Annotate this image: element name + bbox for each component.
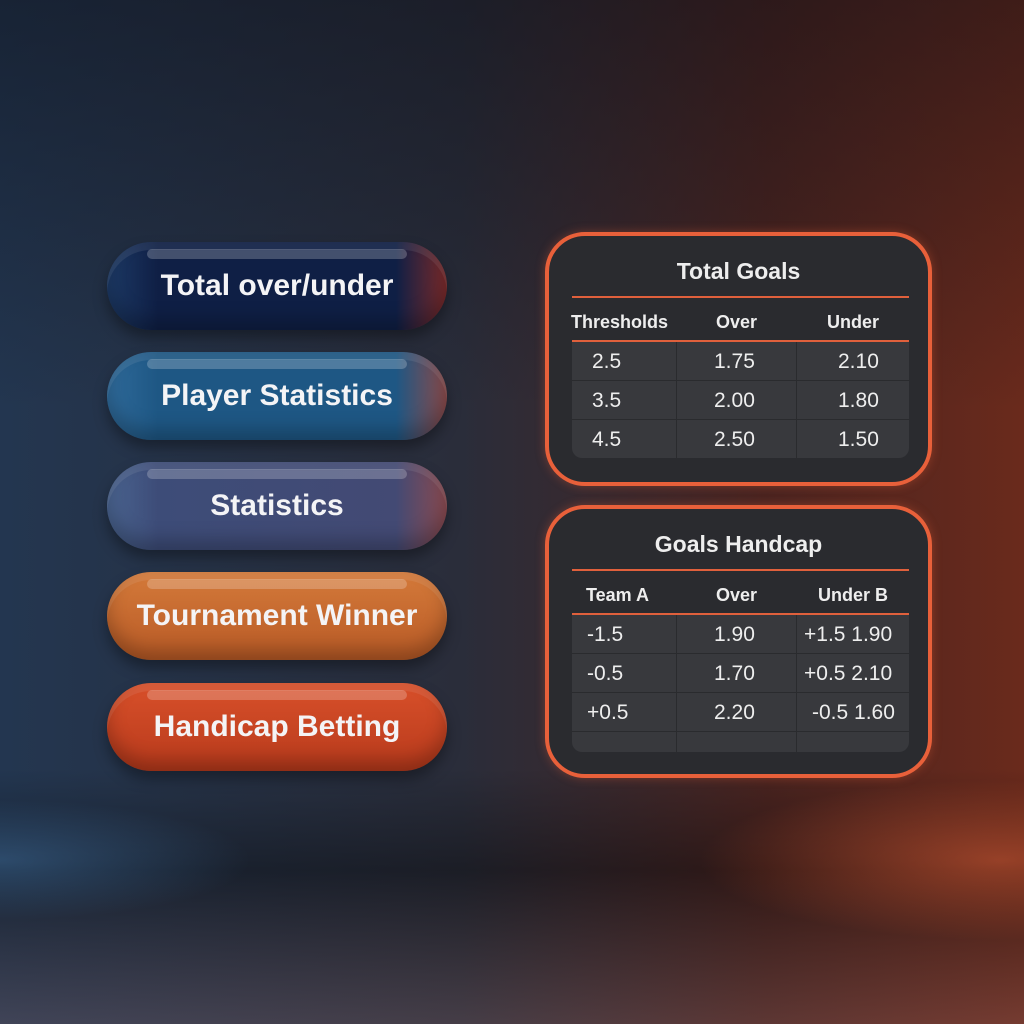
table rows: -1.5 [587, 623, 623, 646]
pill: Total over/under [107, 242, 447, 330]
panel: Total Goals [545, 232, 932, 486]
pill: Tournament Winner [107, 572, 447, 660]
pill: Tournament Winner: Tournament Winner [137, 599, 417, 632]
table rows: +0.5 2.10 [804, 662, 892, 685]
pill: Statistics [107, 462, 447, 550]
table rows: -0.5 [587, 662, 623, 685]
table rows: +1.5 1.90 [804, 623, 892, 646]
pill: Statistics: Statistics [210, 489, 344, 522]
table rows: 1.50 [838, 428, 879, 451]
table rows: 1.75 [714, 350, 755, 373]
pill: Total over/under: Total over/under [161, 269, 393, 302]
table rows: +0.5 [587, 701, 628, 724]
pill: Handicap Betting [107, 683, 447, 771]
table header: Over [716, 585, 757, 605]
table rows [572, 615, 909, 752]
table rows: 3.5 [592, 389, 621, 412]
table rows [572, 342, 909, 458]
table header: Team A [586, 585, 649, 605]
table rows: 2.50 [714, 428, 755, 451]
table rows: 2.5 [592, 350, 621, 373]
table header: Over [716, 312, 757, 332]
pill: Player Statistics: Player Statistics [161, 379, 393, 412]
pill: Player Statistics [107, 352, 447, 440]
table header [571, 312, 879, 332]
table rows: 2.20 [714, 701, 755, 724]
table rows: 2.00 [714, 389, 755, 412]
table rows: 1.70 [714, 662, 755, 685]
heading: Total Goals: Total Goals [677, 258, 800, 284]
table rows: 1.80 [838, 389, 879, 412]
table header: Under [827, 312, 879, 332]
table rows: 1.90 [714, 623, 755, 646]
heading: Goals Handcap: Goals Handcap [655, 531, 822, 557]
table header: Thresholds [571, 312, 668, 332]
table rows: 4.5 [592, 428, 621, 451]
table rows: -0.5 1.60 [812, 701, 895, 724]
table rows: 2.10 [838, 350, 879, 373]
table header [586, 585, 888, 605]
panel: Goals Handcap [545, 505, 932, 778]
pill: Handicap Betting: Handicap Betting [154, 710, 400, 743]
table header: Under B [818, 585, 888, 605]
